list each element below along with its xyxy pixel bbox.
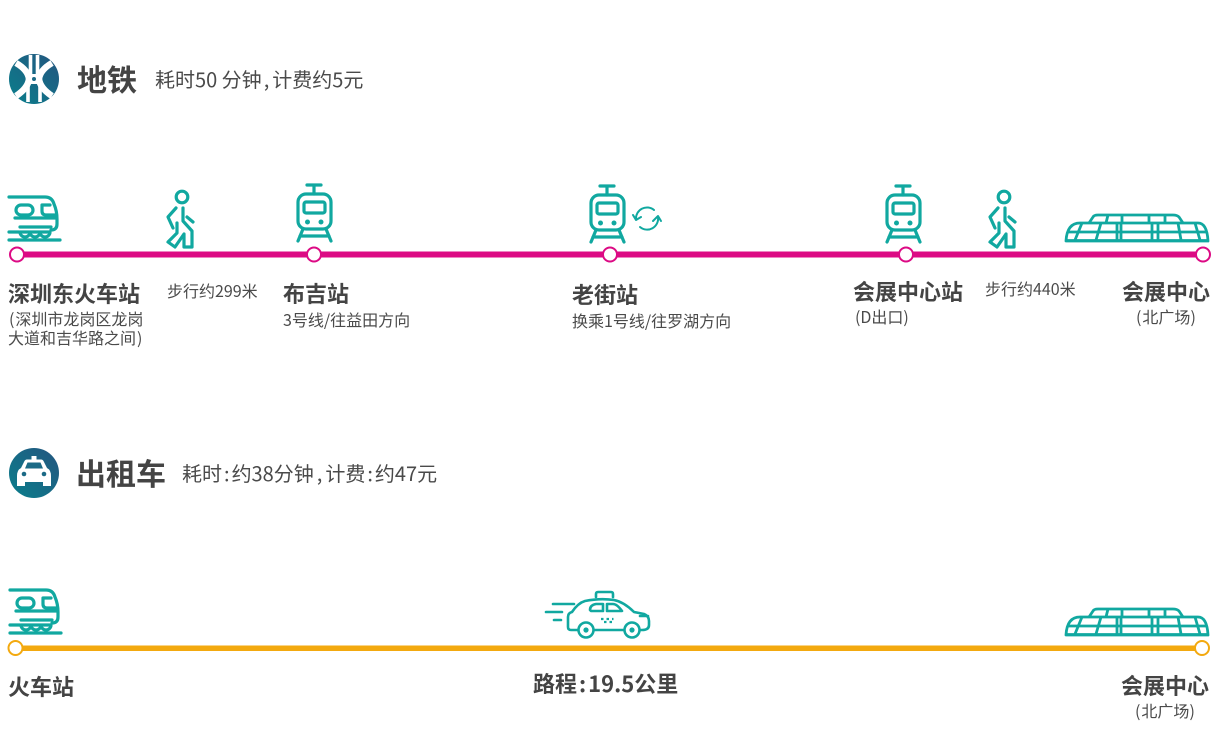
station: Convention Center metro: 会展中心站: [853, 275, 963, 307]
icon: tram 1: [298, 185, 331, 241]
station: Buji: [283, 277, 410, 331]
destination: Convention Center: 会展中心: [1122, 275, 1210, 307]
icon: tram 3: [887, 186, 920, 242]
icon: walker 2: [990, 191, 1015, 247]
station: Shenzhen East: 大道和吉华路之间): [8, 325, 142, 349]
destination: Convention Center: [1122, 275, 1210, 328]
station: Convention Center metro: [853, 275, 963, 328]
distance: 路程:19.5公里: [533, 667, 678, 699]
station: Laojie: 换乘1号线/往罗湖方向: [572, 308, 731, 332]
icon: taxi car: [546, 592, 649, 638]
icon: train 2: [10, 590, 61, 633]
heading: taxi: 出租车: [76, 450, 166, 494]
icon: stadium: [1066, 215, 1208, 241]
walk 440: 步行约440米: [985, 276, 1076, 300]
station: Laojie: [572, 278, 731, 332]
station: Laojie: 老街站: [572, 278, 638, 310]
metro line: [10, 248, 1210, 262]
station: Convention Center metro: (D出口): [855, 304, 909, 328]
icon: walker 1: [168, 191, 193, 247]
icon: train: [9, 197, 60, 240]
icon: stadium 2: [1066, 609, 1208, 635]
station: Buji: 3号线/往益田方向: [283, 307, 410, 331]
station: train station: 火车站: [8, 670, 74, 702]
station: Shenzhen East: 深圳东火车站: [8, 277, 140, 309]
heading: metro: 地铁: [77, 56, 137, 100]
station: Shenzhen East: (深圳市龙岗区龙岗: [9, 306, 143, 330]
icon: taxi logo: [9, 448, 59, 498]
taxi summary: 耗时:约38分钟,计费:约47元: [182, 458, 437, 487]
destination: Convention Center: (北广场): [1136, 304, 1196, 328]
destination: Convention Center taxi: 会展中心: [1121, 669, 1209, 701]
station: Buji: 布吉站: [283, 277, 349, 309]
icon: tram 2: [591, 186, 624, 242]
destination: Convention Center taxi: [1121, 669, 1209, 722]
icon: metro logo: [9, 54, 59, 104]
metro summary: 耗时50 分钟,计费约5元: [155, 64, 363, 93]
walk 299: 步行约299米: [167, 278, 258, 302]
icon: transfer: [633, 207, 661, 230]
station: Shenzhen East: [8, 277, 143, 349]
taxi line: [8, 641, 1209, 655]
destination: Convention Center taxi: (北广场): [1135, 698, 1195, 722]
